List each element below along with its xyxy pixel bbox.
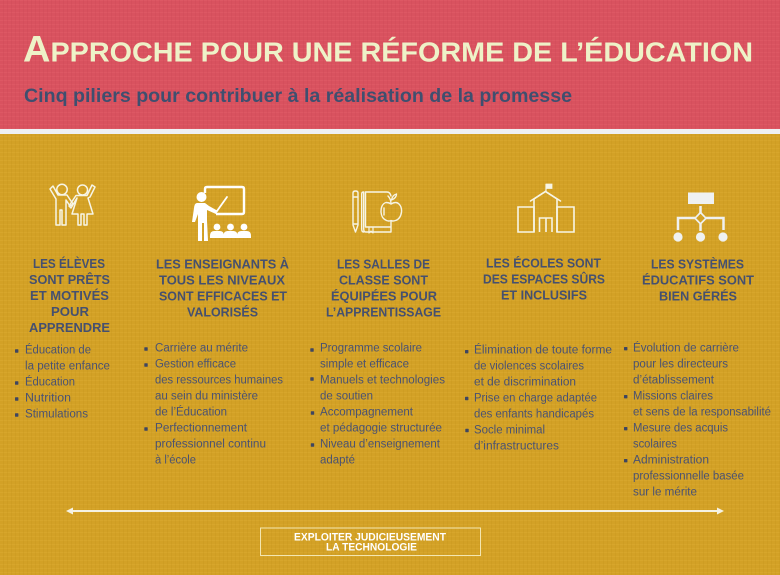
bullet list: pillar 3: et pédagogie structurée (320, 422, 442, 434)
arrow: double-headed horizontal (66, 508, 724, 514)
heading: pillar 5 (642, 256, 754, 304)
heading: pillar 3: LES SALLES DE (337, 256, 430, 272)
bullet list: pillar 3: Accompagnement (320, 406, 414, 418)
title: APPROCHE POUR UNE RÉFORME DE L’ÉDUCATION (23, 28, 753, 70)
bullet list: pillar 5: sur le mérite (633, 486, 697, 498)
bullet list: pillar 4: Élimination de toute forme (474, 343, 612, 356)
bullet list: pillar 5: scolaires (633, 438, 677, 450)
heading: pillar 3 (326, 256, 441, 320)
bullet list: pillar 5: Missions claires (633, 390, 713, 402)
heading: pillar 2: SONT EFFICACES ET (159, 288, 287, 304)
bullet list: pillar 2: professionnel continu (155, 438, 266, 450)
icon: pupils (50, 184, 95, 225)
bullet list: pillar 2: des ressources humaines (155, 374, 283, 386)
bullet list: pillar 3: de soutien (320, 390, 373, 402)
bullet list: pillar 5: d’établissement (633, 374, 715, 386)
heading: pillar 2: LES ENSEIGNANTS À (156, 256, 290, 272)
icon: pencil, book and apple (353, 191, 402, 233)
bullet list: pillar 4: Socle minimal (474, 424, 545, 436)
icon: teacher at the board (192, 187, 251, 241)
bullet list: pillar 2: au sein du ministère (155, 390, 258, 402)
heading: pillar 1: ET MOTIVÉS (30, 288, 109, 303)
heading: pillar 1: LES ÉLÈVES (33, 256, 105, 271)
panel: header band (0, 0, 780, 129)
bullet list: pillar 5: Évolution de carrière (633, 341, 739, 354)
callout: use technology wisely: EXPLOITER JUDICIEUSEMENT (294, 532, 446, 544)
heading: pillar 5: LES SYSTÈMES (651, 256, 744, 272)
bullet list: pillar 5: et sens de la responsabilité (633, 406, 771, 418)
bullet list: pillar 3 (310, 342, 445, 466)
bullet list: pillar 3: Programme scolaire (320, 342, 422, 354)
callout: use technology wisely (260, 528, 480, 556)
bullet list: pillar 4: des enfants handicapés (474, 408, 594, 420)
bullet list: pillar 2: Gestion efficace (155, 358, 236, 370)
bullet list: pillar 2 (144, 342, 283, 466)
bullet list: pillar 4 (465, 343, 612, 452)
bullet list: pillar 5: Administration (633, 454, 709, 466)
heading: pillar 4 (483, 256, 605, 303)
heading: pillar 2: TOUS LES NIVEAUX (159, 272, 285, 288)
bullet list: pillar 2: Perfectionnement (155, 422, 248, 434)
heading: pillar 2: VALORISÉS (187, 304, 258, 320)
heading: pillar 3: ÉQUIPÉES POUR (331, 288, 438, 304)
bullet list: pillar 3: Niveau d’enseignement (320, 438, 441, 450)
bullet list: pillar 5: professionnelle basée (633, 470, 744, 482)
heading: pillar 5: ÉDUCATIFS SONT (642, 272, 754, 288)
bullet list: pillar 5: Mesure des acquis (633, 422, 728, 434)
bullet list: pillar 1: Éducation de (25, 343, 91, 356)
heading: pillar 1: POUR (51, 304, 90, 319)
bullet list: pillar 4: et de discrimination (474, 376, 576, 388)
callout: use technology wisely: LA TECHNOLOGIE (326, 542, 417, 554)
panel: gold body (0, 134, 780, 575)
heading: pillar 4: LES ÉCOLES SONT (486, 256, 601, 271)
bullet list: pillar 5: pour les directeurs (633, 358, 728, 370)
heading: pillar 3: CLASSE SONT (339, 272, 428, 288)
heading: pillar 4: ET INCLUSIFS (501, 288, 587, 303)
bullet list: pillar 2: à l’école (155, 454, 196, 466)
bullet list: pillar 4: Prise en charge adaptée (474, 392, 597, 404)
heading: pillar 1: APPRENDRE (29, 320, 110, 335)
bullet list: pillar 2: de l’Éducation (155, 405, 227, 418)
bullet list: pillar 5 (624, 341, 771, 498)
bullet list: pillar 4: de violences scolaires (474, 360, 584, 372)
bullet list: pillar 1 (15, 343, 110, 420)
bullet list: pillar 3: simple et efficace (320, 358, 409, 370)
heading: pillar 1: SONT PRÊTS (29, 272, 110, 287)
bullet list: pillar 2: Carrière au mérite (155, 342, 248, 354)
heading: pillar 2 (156, 256, 290, 320)
icon: school building (518, 184, 574, 232)
heading: pillar 4: DES ESPACES SÛRS (483, 272, 605, 287)
bullet list: pillar 1: Stimulations (25, 408, 88, 420)
bullet list: pillar 4: d’infrastructures (474, 440, 559, 452)
bullet list: pillar 3: adapté (320, 454, 355, 466)
panel: white separator (0, 129, 780, 134)
heading: pillar 3: L’APPRENTISSAGE (326, 304, 441, 320)
subtitle: Cinq piliers pour contribuer à la réalisation de la promesse (24, 86, 572, 107)
bullet list: pillar 3: Manuels et technologies (320, 374, 445, 386)
heading: pillar 1 (29, 256, 110, 335)
bullet list: pillar 1: Éducation (25, 375, 75, 388)
heading: pillar 5: BIEN GÉRÉS (659, 288, 737, 304)
bullet list: pillar 1: la petite enfance (25, 360, 110, 372)
icon: management hierarchy (673, 192, 728, 242)
bullet list: pillar 1: Nutrition (25, 392, 71, 404)
